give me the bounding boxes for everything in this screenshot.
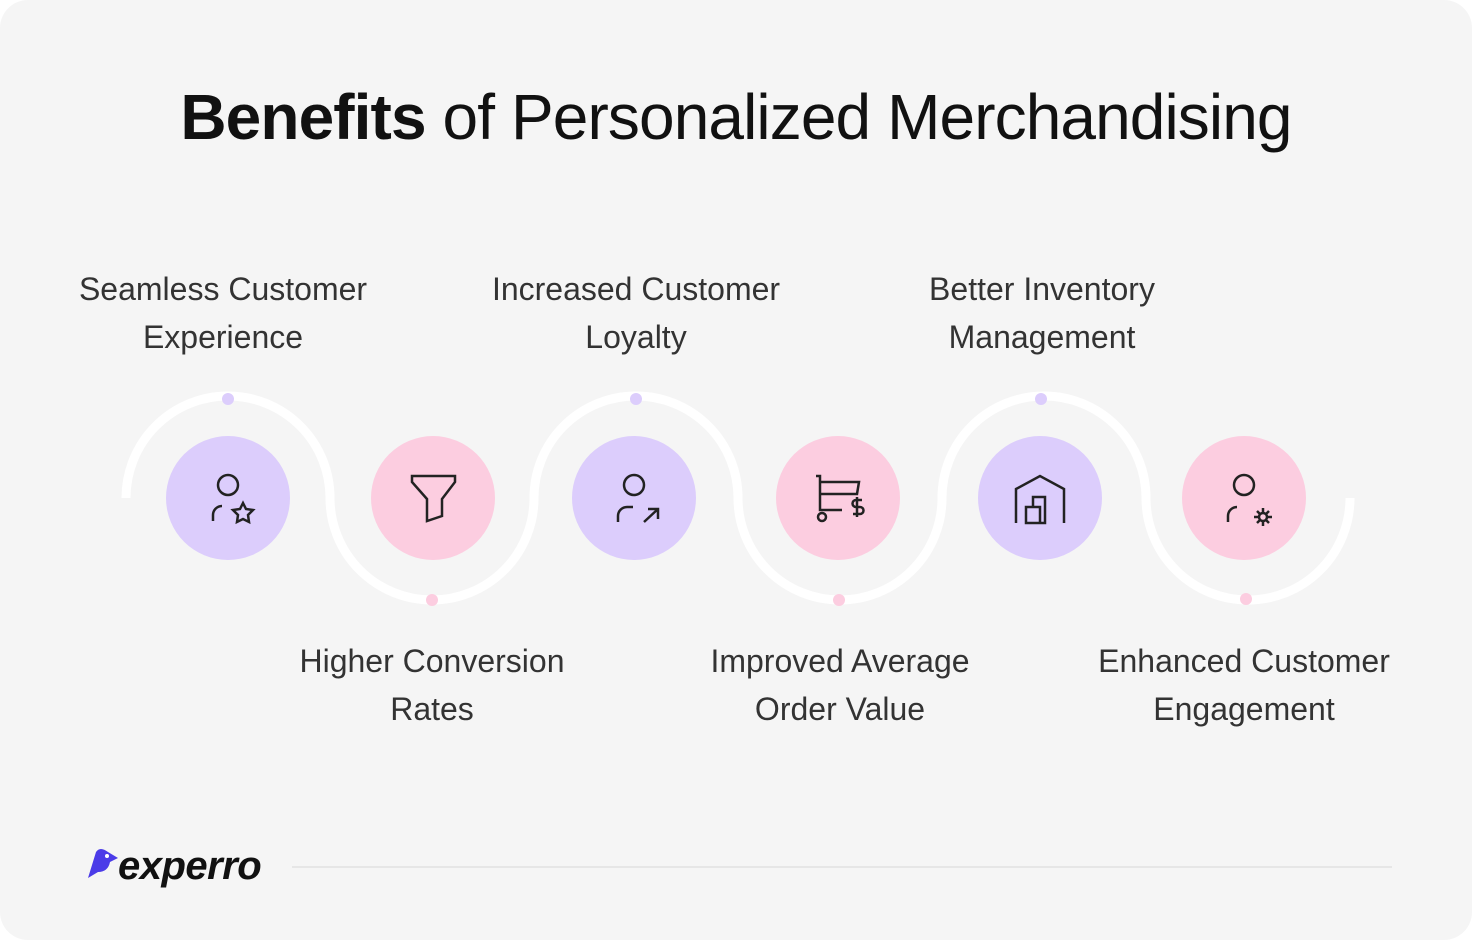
label: engagement: Engagement [1153,691,1335,727]
logo: experro [118,844,261,888]
icon circle 4: cart dollar [776,436,900,560]
icon circle 3: user arrow [572,436,696,560]
icon circle 2: funnel [371,436,495,560]
label: aov: Improved Average [710,643,970,679]
label: inventory [929,271,1155,355]
label: aov [710,643,970,727]
label: engagement: Enhanced Customer [1098,643,1390,679]
icon circle 6: user gear [1182,436,1306,560]
label: seamless [79,271,367,355]
label: conversion [299,643,564,727]
label: loyalty: Loyalty [585,319,687,355]
label: conversion: Rates [390,691,474,727]
title: Benefits of Personalized Merchandising [180,81,1292,153]
label: aov: Order Value [755,691,925,727]
label: inventory: Better Inventory [929,271,1155,307]
label: engagement [1098,643,1390,727]
icon circle 1: user star [166,436,290,560]
label: loyalty: Increased Customer [492,271,780,307]
label: inventory: Management [949,319,1135,355]
label: seamless: Experience [143,319,303,355]
icon circle 5: warehouse [978,436,1102,560]
label: loyalty [492,271,780,355]
label: conversion: Higher Conversion [299,643,564,679]
label: seamless: Seamless Customer [79,271,367,307]
